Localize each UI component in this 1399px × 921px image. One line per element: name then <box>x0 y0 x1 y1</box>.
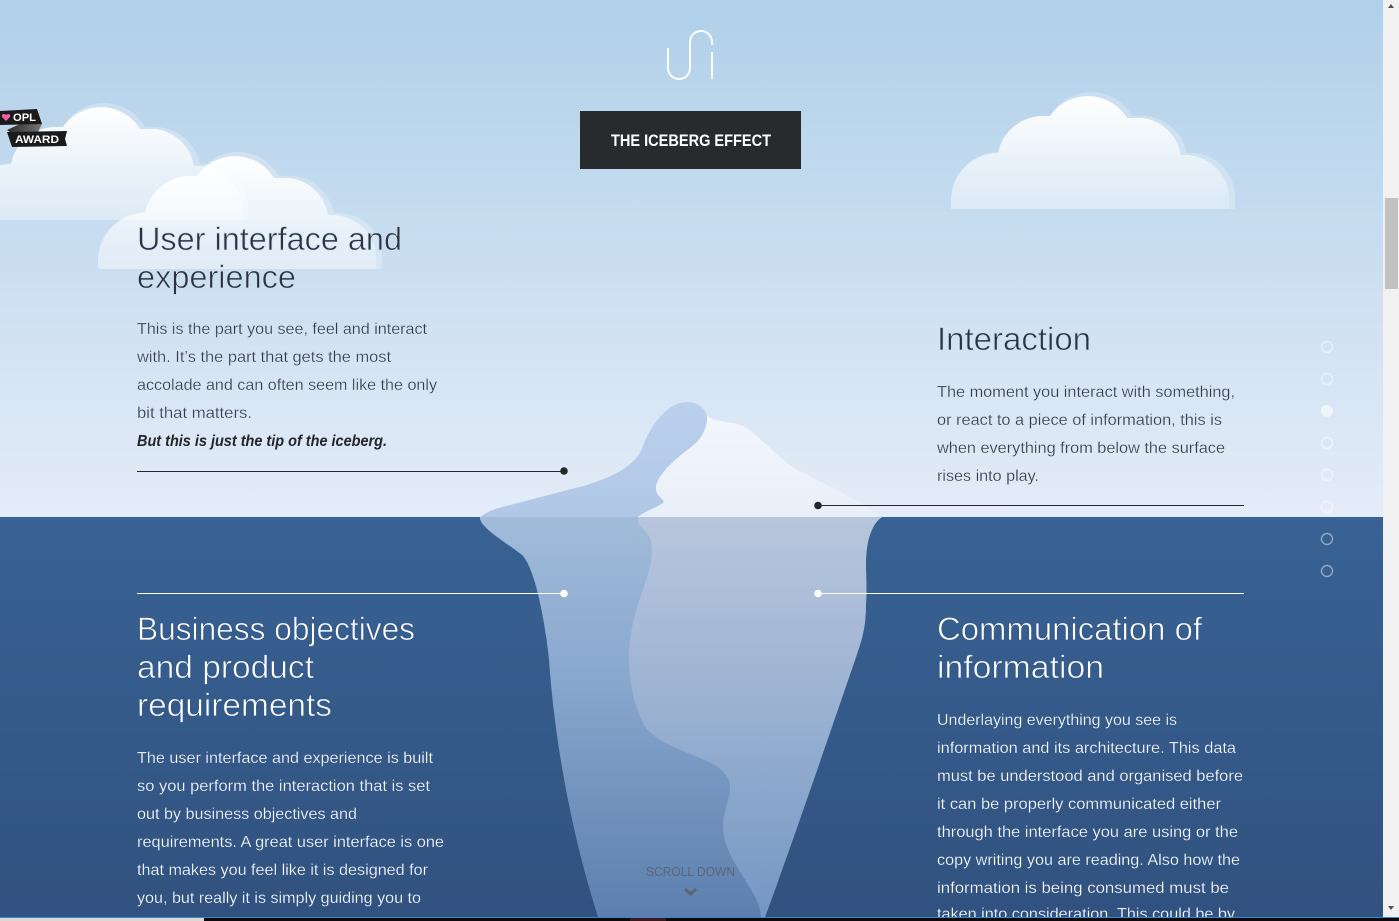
cloud: top left <box>0 103 248 220</box>
heading: information <box>937 649 1104 685</box>
scroll down prompt <box>646 864 735 894</box>
award badge: AWARD <box>15 134 59 146</box>
award badge: OPL <box>13 112 36 124</box>
heading: and product <box>137 649 314 685</box>
panel: user interface and experience <box>136 221 568 475</box>
heading <box>137 221 402 295</box>
body text: The moment you interact with something, <box>937 384 1235 401</box>
leader line <box>137 590 568 597</box>
body text: bit that matters. <box>137 405 252 422</box>
sky background <box>0 0 1383 517</box>
iceberg <box>480 402 882 917</box>
logo <box>668 31 712 79</box>
body text: you, but really it is simply guiding you to <box>137 890 421 907</box>
heading: experience <box>137 259 296 295</box>
desktop taskbar strip <box>0 917 1399 921</box>
panel: interaction <box>814 321 1244 509</box>
body text: through the interface you are using or the <box>937 824 1238 841</box>
heading: requirements <box>137 687 332 723</box>
icon: chevron <box>685 889 696 894</box>
body text: with. It’s the part that gets the most <box>136 349 392 366</box>
body text: out by business objectives and <box>137 806 357 823</box>
title banner: THE ICEBERG EFFECT <box>611 131 772 150</box>
heading: User interface and <box>137 221 402 257</box>
iceberg: lit tip above water <box>638 416 882 517</box>
body text: it can be properly communicated either <box>937 796 1222 813</box>
body text: copy writing you are reading. Also how the <box>937 852 1240 869</box>
body text: so you perform the interaction that is set <box>137 778 431 795</box>
body text <box>936 384 1235 485</box>
water background <box>0 517 1383 917</box>
body text <box>136 321 437 450</box>
section navigation dots <box>1321 342 1333 576</box>
body text: that makes you feel like it is designed for <box>137 862 429 879</box>
heading: Interaction <box>937 321 1091 357</box>
icon: heart <box>2 114 10 121</box>
body text: accolade and can often seem like the only <box>137 377 437 394</box>
leader line <box>137 467 568 475</box>
iceberg: lit body under water <box>629 517 882 917</box>
cloud: middle left <box>98 152 382 269</box>
heading: Communication of <box>937 611 1202 647</box>
leader line <box>814 590 1244 597</box>
body text: This is the part you see, feel and interact <box>137 321 428 338</box>
heading: Business objectives <box>137 611 415 647</box>
heading <box>937 611 1202 685</box>
body text: or react to a piece of information, this is <box>937 412 1222 429</box>
body text: when everything from below the surface <box>936 440 1225 457</box>
panel: communication of information <box>814 590 1244 921</box>
body text <box>137 750 444 907</box>
body text: information and its architecture. This data <box>937 740 1236 757</box>
body text: requirements. A great user interface is one <box>137 834 444 851</box>
browser scrollbar <box>1383 0 1399 917</box>
body text: must be understood and organised before <box>937 768 1243 785</box>
body text: Underlaying everything you see is <box>937 712 1177 729</box>
heading <box>137 611 415 723</box>
body text: The user interface and experience is built <box>137 750 434 767</box>
leader line <box>814 502 1244 509</box>
award badge <box>0 109 67 147</box>
body text <box>937 712 1243 921</box>
title banner <box>580 111 801 169</box>
body text: information is being consumed must be <box>937 880 1229 897</box>
panel: business objectives <box>137 590 568 907</box>
iceberg: shaded body under water <box>480 517 882 917</box>
body text: rises into play. <box>937 468 1039 485</box>
body text: But this is just the tip of the iceberg. <box>137 433 387 450</box>
cloud: top right <box>951 92 1235 209</box>
iceberg: shaded tip above water <box>480 402 707 518</box>
scroll down prompt: SCROLL DOWN <box>646 864 735 879</box>
